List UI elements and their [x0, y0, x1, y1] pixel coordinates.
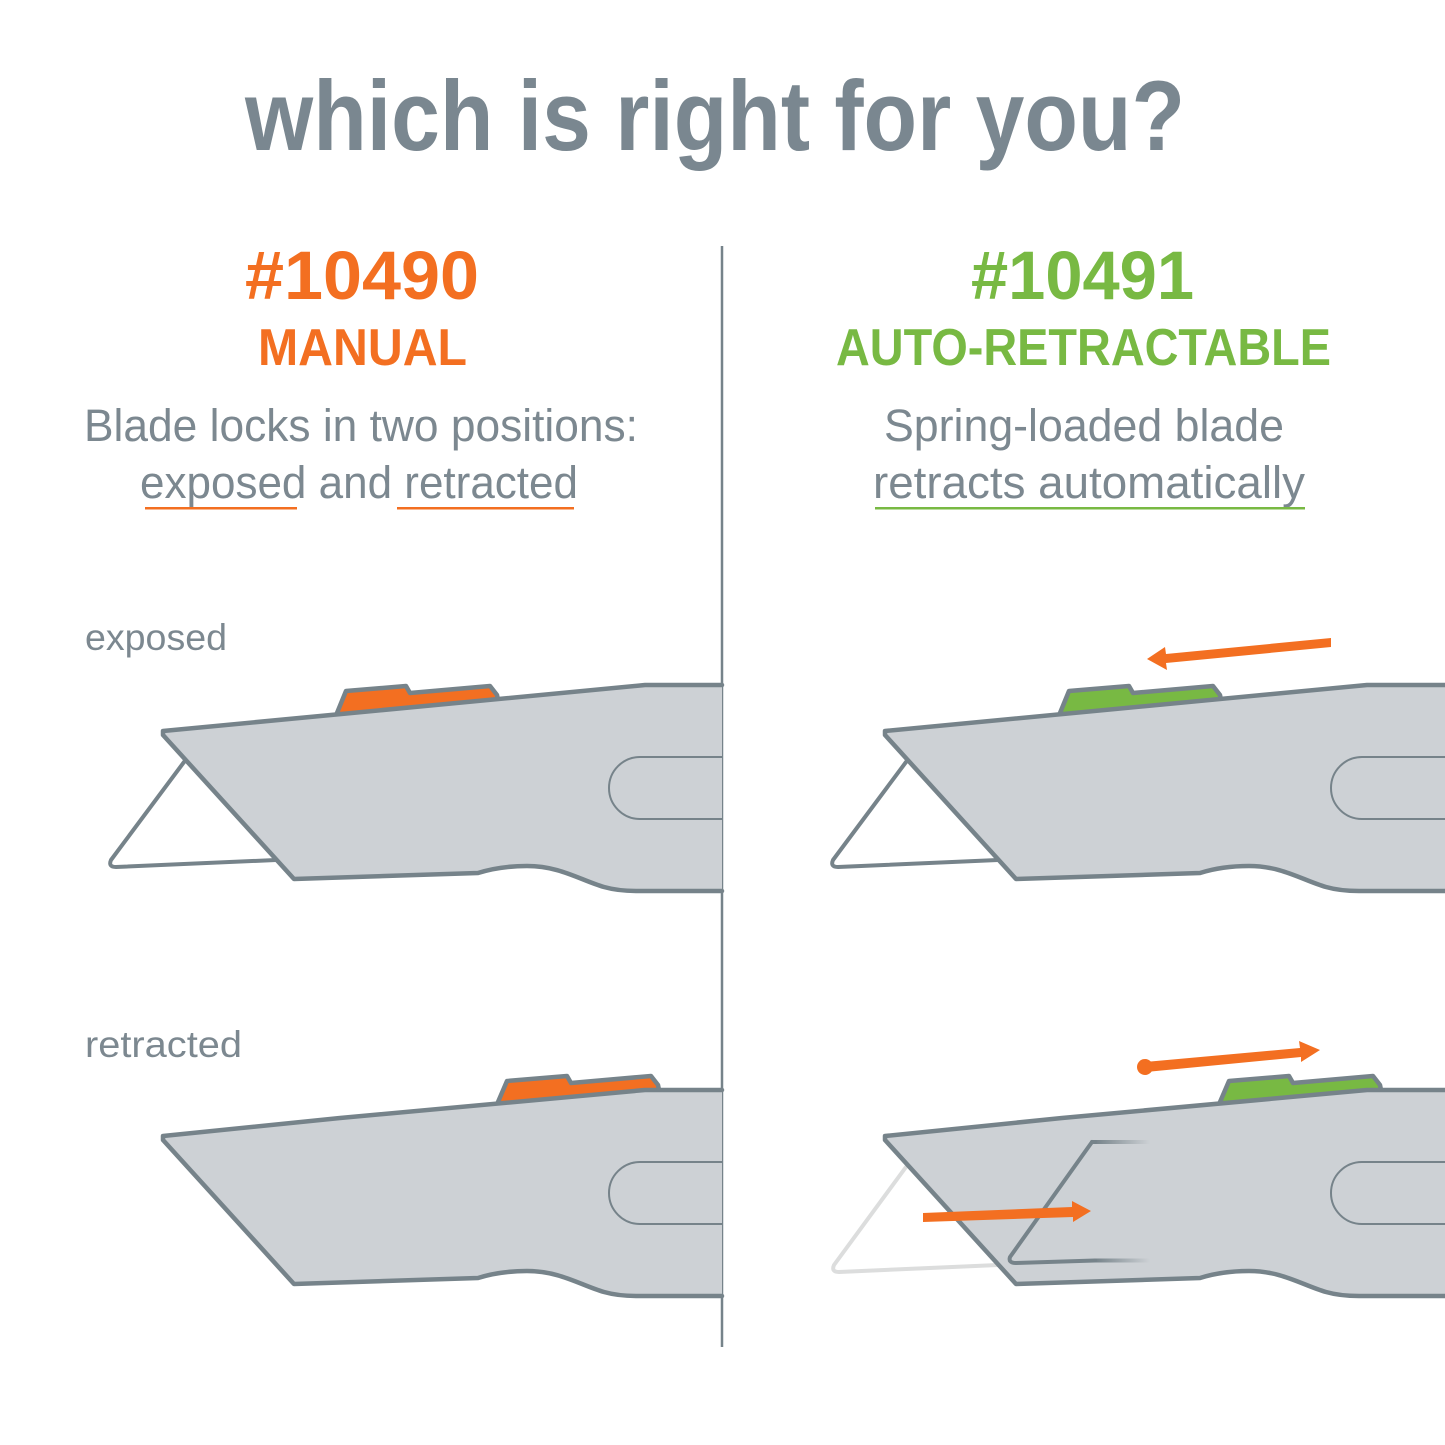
- heading: manual: MANUAL: [258, 319, 467, 377]
- slot: [1331, 1162, 1445, 1224]
- knife: manual exposed: [110, 685, 722, 891]
- ghost blade: [833, 1167, 998, 1272]
- knife: auto exposed: [832, 685, 1445, 891]
- model number 10491: #10491: [971, 237, 1194, 314]
- description: manual: [84, 400, 638, 510]
- slot: [1331, 757, 1445, 819]
- blade: [110, 762, 276, 867]
- knife: auto retracted: [833, 1076, 1445, 1296]
- handle: [885, 1090, 1445, 1296]
- panel: manual: [84, 237, 722, 1296]
- description: manual: Blade locks in two positions:: [84, 400, 638, 451]
- description: auto-retractable: Spring-loaded blade: [884, 400, 1284, 451]
- description: auto-retractable: [873, 400, 1306, 510]
- blade: [832, 762, 998, 867]
- slider: green: [1220, 1076, 1381, 1105]
- description: manual: exposed and retracted: [140, 457, 578, 508]
- slider: orange: [498, 1076, 659, 1105]
- description: auto-retractable: retracts automatically: [873, 457, 1306, 508]
- arrow: slider released: [1137, 1041, 1320, 1075]
- title: which is right for you?: [244, 60, 1185, 171]
- arrow: slider pushed forward: [1147, 638, 1331, 670]
- slider: orange: [337, 686, 498, 716]
- center divider: [721, 246, 723, 1347]
- slider: green: [1060, 686, 1221, 716]
- slot: [609, 1162, 722, 1224]
- handle: [163, 685, 722, 891]
- panel: auto-retractable: [832, 237, 1445, 1296]
- knife: manual retracted: [163, 1076, 722, 1296]
- arrow: blade retracting: [923, 1201, 1091, 1222]
- model number 10490: #10490: [245, 237, 479, 314]
- label: retracted: retracted: [85, 1024, 242, 1065]
- label: exposed: exposed: [85, 617, 227, 658]
- handle: [885, 685, 1445, 891]
- handle: [163, 1090, 722, 1296]
- heading: auto-retractable: AUTO-RETRACTABLE: [836, 319, 1331, 377]
- slot: [609, 757, 722, 819]
- retracted blade outline: [1010, 1140, 1150, 1263]
